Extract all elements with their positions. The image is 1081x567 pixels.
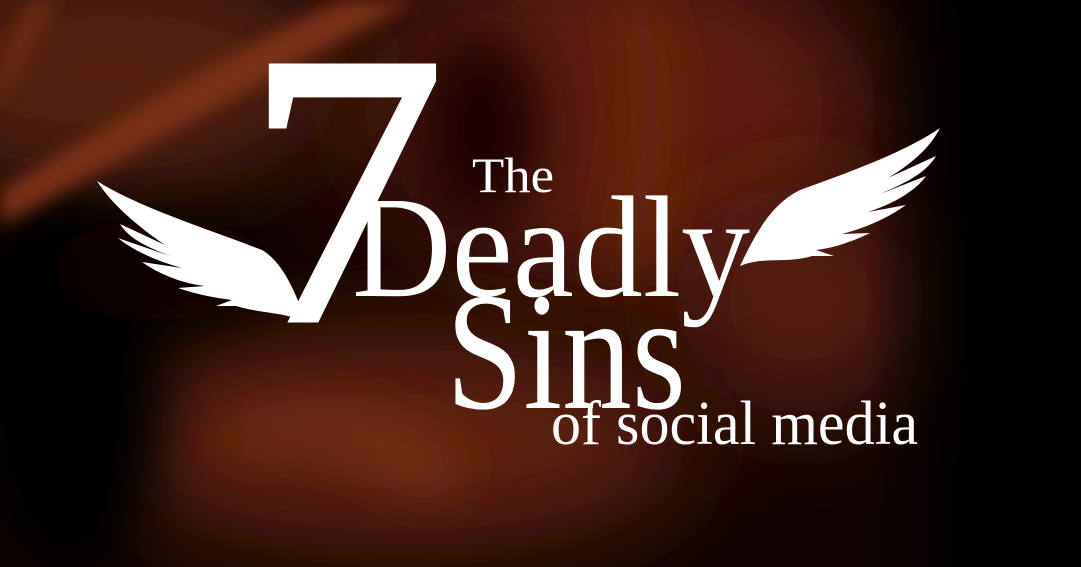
icon: right wing xyxy=(740,128,940,266)
heading: The: The xyxy=(472,147,554,203)
subheading: of social media: of social media xyxy=(551,390,918,458)
icon: left wing xyxy=(97,181,306,323)
heading: Deadly: Deadly xyxy=(352,168,750,328)
heading: Sins: Sins xyxy=(446,259,686,445)
